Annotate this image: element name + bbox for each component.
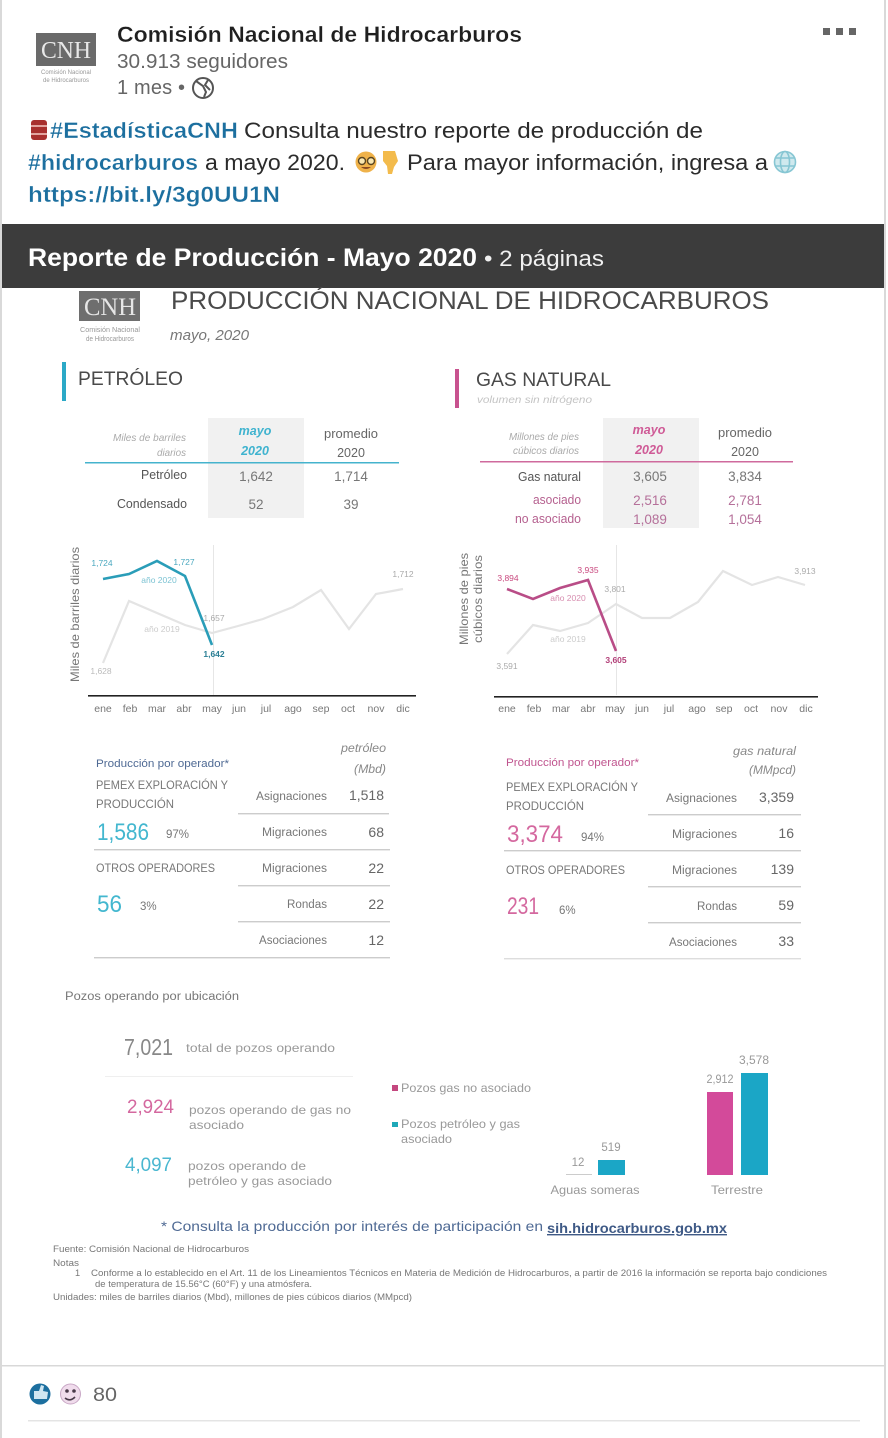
bar chart: pozos por ubicación: 519 <box>601 1142 621 1154</box>
panel: producción por operador petróleo: Migraciones <box>262 863 327 875</box>
table: petróleo: mayo <box>239 424 272 438</box>
post message <box>28 118 796 207</box>
icon: pointing down <box>383 151 398 174</box>
panel: producción por operador gas: 231 <box>507 893 539 920</box>
axis title: Millones de pies <box>457 553 471 645</box>
footnotes: Fuente: Comisión Nacional de Hidrocarburos <box>53 1244 249 1254</box>
icon: CNH report logo: CNH <box>84 294 136 321</box>
panel: producción por operador petróleo: 1,586 <box>97 819 149 846</box>
table: gas natural: 1,054 <box>728 512 762 527</box>
data labels: 1,727 <box>173 557 195 567</box>
document title bar: • 2 páginas <box>484 246 604 271</box>
table: petróleo: 1,714 <box>334 469 368 484</box>
icon: oil barrel <box>31 120 47 140</box>
panel: pozos operando: Pozos operando por ubicación <box>65 991 239 1003</box>
legend <box>392 1081 531 1146</box>
panel: producción por operador gas: PRODUCCIÓN <box>506 800 584 813</box>
table: petróleo: 2020 <box>337 446 365 460</box>
panel: producción por operador gas: 139 <box>771 861 794 877</box>
month labels: sep <box>716 703 733 715</box>
panel: pozos operando: 2,924 <box>127 1097 174 1118</box>
panel: producción por operador gas: 94% <box>581 832 604 844</box>
table: gas natural: asociado <box>533 493 581 507</box>
document title bar: Reporte de Producción - Mayo 2020 <box>28 244 477 272</box>
panel: producción por operador petróleo: 22 <box>368 896 384 912</box>
panel: producción por operador petróleo: (Mbd) <box>354 764 386 776</box>
month labels: jun <box>634 703 649 715</box>
callout: consulta <box>161 1218 727 1236</box>
icon: globe emoji <box>774 152 796 172</box>
icon: CNH logo small: CNH <box>41 38 91 64</box>
legend: Pozos petróleo y gas <box>401 1117 520 1131</box>
footnotes: Conforme a lo establecido en el Art. 11 de los Lineamientos Técnicos en Materia de Medición de Hidrocarburos, a partir de 2016 la información se reporta bajo condiciones <box>91 1268 827 1278</box>
panel: producción por operador petróleo: Producción por operador* <box>96 758 230 770</box>
panel: producción por operador gas: Producción por operador* <box>506 757 640 769</box>
table: gas natural: 2,516 <box>633 493 667 508</box>
table: gas natural: 3,834 <box>728 469 762 484</box>
panel: pozos operando <box>65 991 353 1188</box>
panel: producción por operador gas: Migraciones <box>672 829 737 841</box>
table: petróleo: Miles de barriles <box>113 432 187 444</box>
panel: producción por operador gas: Rondas <box>697 901 737 913</box>
panel: producción por operador gas: 33 <box>778 933 794 949</box>
panel: producción por operador gas: 3,359 <box>759 789 794 805</box>
month labels: jul <box>260 703 271 715</box>
table: petróleo: promedio <box>324 427 378 441</box>
month labels: abr <box>580 703 596 715</box>
panel: producción por operador petróleo: 1,518 <box>349 787 384 803</box>
table: petróleo: 39 <box>343 497 359 512</box>
bar chart: pozos por ubicación: 3,578 <box>739 1055 769 1067</box>
month labels <box>498 703 813 715</box>
data labels: 1,712 <box>392 569 414 579</box>
panel: producción por operador gas: 59 <box>778 897 794 913</box>
post message: Para mayor información, ingresa a <box>407 150 769 175</box>
data labels: 3,591 <box>496 661 518 671</box>
table: petróleo: Condensado <box>117 497 187 511</box>
callout: consulta: * Consulta la producción por interés de participación en <box>161 1218 543 1234</box>
month labels: ene <box>498 703 516 715</box>
panel: producción por operador petróleo: Migraciones <box>262 827 327 839</box>
reaction count: 80 <box>93 1385 117 1406</box>
table: gas natural: 2,781 <box>728 493 762 508</box>
post message: #hidrocarburos <box>28 150 198 175</box>
report heading <box>79 286 769 344</box>
table: petróleo: 1,642 <box>239 469 273 484</box>
panel: producción por operador petróleo: Asociaciones <box>259 935 327 947</box>
footnotes <box>53 1244 827 1302</box>
document title bar <box>2 224 884 288</box>
axis title: cúbicos diarios <box>471 555 485 643</box>
icon: curious face <box>60 1384 80 1404</box>
report date: mayo, 2020 <box>170 327 250 344</box>
panel: pozos operando: 4,097 <box>125 1155 172 1176</box>
panel: producción por operador petróleo: Rondas <box>287 899 327 911</box>
post message: https://bit.ly/3g0UU1N <box>28 182 280 207</box>
month labels: oct <box>341 703 355 715</box>
panel: producción por operador gas: Asignaciones <box>666 793 737 805</box>
table: gas natural: mayo <box>633 423 666 437</box>
table: petróleo: 52 <box>248 497 264 512</box>
month labels: sep <box>313 703 330 715</box>
table: gas natural: 3,605 <box>633 469 667 484</box>
table: gas natural: 2020 <box>634 443 663 457</box>
line chart: gas natural <box>457 545 818 715</box>
post message: Consulta nuestro reporte de producción de <box>244 118 703 143</box>
table: gas natural <box>480 418 793 528</box>
month labels: dic <box>396 703 410 715</box>
panel: producción por operador gas: OTROS OPERADORES <box>506 865 625 877</box>
data labels: 3,935 <box>577 565 599 575</box>
data labels: 1,628 <box>90 666 112 676</box>
table: gas natural: promedio <box>718 426 772 440</box>
month labels: jun <box>231 703 246 715</box>
bar chart: pozos por ubicación <box>550 1055 769 1197</box>
table: petróleo: Petróleo <box>141 468 187 482</box>
month labels: oct <box>744 703 758 715</box>
icon: CNH report logo <box>79 291 140 343</box>
panel: producción por operador gas: gas natural <box>733 746 796 758</box>
data labels: 3,605 <box>605 655 627 665</box>
month labels: mar <box>148 703 167 715</box>
post age: 1 mes • <box>117 77 185 99</box>
panel: producción por operador petróleo: PRODUCCIÓN <box>96 798 174 811</box>
panel: producción por operador gas: PEMEX EXPLORACIÓN Y <box>506 781 638 794</box>
panel: producción por operador petróleo: 3% <box>140 901 157 913</box>
icon: more menu <box>823 28 856 35</box>
bar chart: pozos por ubicación: Terrestre <box>711 1183 763 1197</box>
panel: pozos operando: pozos operando de <box>188 1159 306 1173</box>
table: petróleo: 2020 <box>240 444 269 458</box>
post message: #EstadísticaCNH <box>50 118 238 143</box>
icon: nerd face <box>356 152 376 172</box>
month labels: mar <box>552 703 571 715</box>
month labels: feb <box>123 703 137 715</box>
panel: producción por operador gas: 16 <box>778 825 794 841</box>
series: 2019 <box>103 589 403 663</box>
panel: producción por operador gas: (MMpcd) <box>749 765 796 777</box>
panel: producción por operador petróleo: 97% <box>166 829 189 841</box>
month labels: ene <box>94 703 112 715</box>
data labels: 1,724 <box>91 558 113 568</box>
data labels: 3,894 <box>497 573 519 583</box>
footnotes: Notas <box>53 1258 79 1268</box>
callout: consulta: sih.hidrocarburos.gob.mx <box>547 1220 727 1236</box>
panel: producción por operador petróleo: Asignaciones <box>256 791 327 803</box>
data labels: año 2019 <box>550 634 586 644</box>
icon: CNH logo small: Comisión Nacional <box>41 70 91 76</box>
panel: gas natural summary <box>455 369 793 528</box>
panel: gas natural summary: GAS NATURAL <box>476 370 611 391</box>
axis title: Miles de barriles diarios <box>68 547 82 682</box>
panel: producción por operador petróleo: PEMEX EXPLORACIÓN Y <box>96 779 228 792</box>
icon: like <box>30 1384 50 1404</box>
reactions bar <box>30 1384 117 1406</box>
month labels: nov <box>368 703 385 715</box>
month labels: jul <box>663 703 674 715</box>
month labels: may <box>202 703 223 715</box>
footnotes: de temperatura de 15.56°C (60°F) y una atmósfera. <box>95 1279 312 1289</box>
icon: CNH report logo: de Hidrocarburos <box>86 336 134 343</box>
footnotes: 1 <box>75 1268 80 1278</box>
bar chart: pozos por ubicación: 2,912 <box>706 1074 734 1086</box>
table: gas natural: Gas natural <box>518 470 581 484</box>
panel: producción por operador gas: 3,374 <box>507 821 563 848</box>
report title: PRODUCCIÓN NACIONAL DE HIDROCARBUROS <box>171 286 769 315</box>
panel: pozos operando: total de pozos operando <box>186 1041 335 1055</box>
icon: globe <box>193 78 213 98</box>
data labels: año 2019 <box>144 624 180 634</box>
month labels: abr <box>176 703 192 715</box>
table: petróleo: diarios <box>157 447 187 459</box>
legend: asociado <box>401 1132 452 1146</box>
panel: pozos operando: pozos operando de gas no <box>189 1103 351 1117</box>
month labels: nov <box>771 703 788 715</box>
panel: producción por operador petróleo: 68 <box>368 824 384 840</box>
data labels <box>90 557 414 676</box>
table: gas natural: 2020 <box>731 445 759 459</box>
panel: producción por operador petróleo: petróleo <box>340 743 387 755</box>
panel: pozos operando: petróleo y gas asociado <box>188 1174 332 1188</box>
month labels <box>94 703 410 715</box>
icon: CNH logo small <box>36 33 96 84</box>
month labels: may <box>605 703 626 715</box>
series: 2019 <box>507 571 805 654</box>
series: 2020 <box>103 561 212 645</box>
icon: CNH logo small: de Hidrocarburos <box>43 78 89 84</box>
followers: 30.913 seguidores <box>117 51 288 73</box>
data labels: 3,801 <box>604 584 626 594</box>
series: 2020 <box>507 580 616 651</box>
table: gas natural: 1,089 <box>633 512 667 527</box>
post message: a mayo 2020. <box>205 150 345 175</box>
panel: producción por operador gas: Asociaciones <box>669 937 737 949</box>
data labels: 1,657 <box>203 613 225 623</box>
month labels: ago <box>688 703 706 715</box>
panel: petróleo summary <box>62 362 399 518</box>
panel: pozos operando: 7,021 <box>124 1034 173 1060</box>
panel: producción por operador petróleo: 22 <box>368 860 384 876</box>
panel: gas natural summary: volumen sin nitrógeno <box>477 395 593 406</box>
table: petróleo <box>85 418 399 518</box>
month labels: feb <box>527 703 541 715</box>
organization name: Comisión Nacional de Hidrocarburos <box>117 22 522 47</box>
panel: producción por operador petróleo <box>94 743 390 958</box>
panel: petróleo summary: PETRÓLEO <box>78 368 183 390</box>
icon: CNH report logo: Comisión Nacional <box>80 327 140 334</box>
panel: producción por operador gas <box>504 746 801 959</box>
data labels: año 2020 <box>141 575 177 585</box>
axis title <box>457 553 485 645</box>
table: gas natural: Millones de pies <box>509 431 580 443</box>
table: gas natural: cúbicos diarios <box>513 445 580 457</box>
panel: producción por operador petróleo: 56 <box>97 891 122 918</box>
panel: producción por operador petróleo: OTROS OPERADORES <box>96 863 215 875</box>
bar chart: pozos por ubicación: 12 <box>572 1157 584 1169</box>
panel: producción por operador gas: 6% <box>559 905 576 917</box>
data labels: año 2020 <box>550 593 586 603</box>
panel: pozos operando: asociado <box>189 1118 244 1132</box>
line chart: petróleo <box>68 545 416 715</box>
panel: producción por operador gas: Migraciones <box>672 865 737 877</box>
data labels <box>496 565 816 671</box>
post header <box>36 22 856 99</box>
data labels: 3,913 <box>794 566 816 576</box>
data labels: 1,642 <box>203 649 225 659</box>
month labels: ago <box>284 703 302 715</box>
footnotes: Unidades: miles de barriles diarios (Mbd), millones de pies cúbicos diarios (MMpcd) <box>53 1292 412 1302</box>
panel: producción por operador petróleo: 12 <box>368 932 384 948</box>
legend: Pozos gas no asociado <box>401 1081 531 1095</box>
month labels: dic <box>799 703 813 715</box>
bar chart: pozos por ubicación: Aguas someras <box>550 1183 640 1197</box>
table: gas natural: no asociado <box>515 512 581 526</box>
